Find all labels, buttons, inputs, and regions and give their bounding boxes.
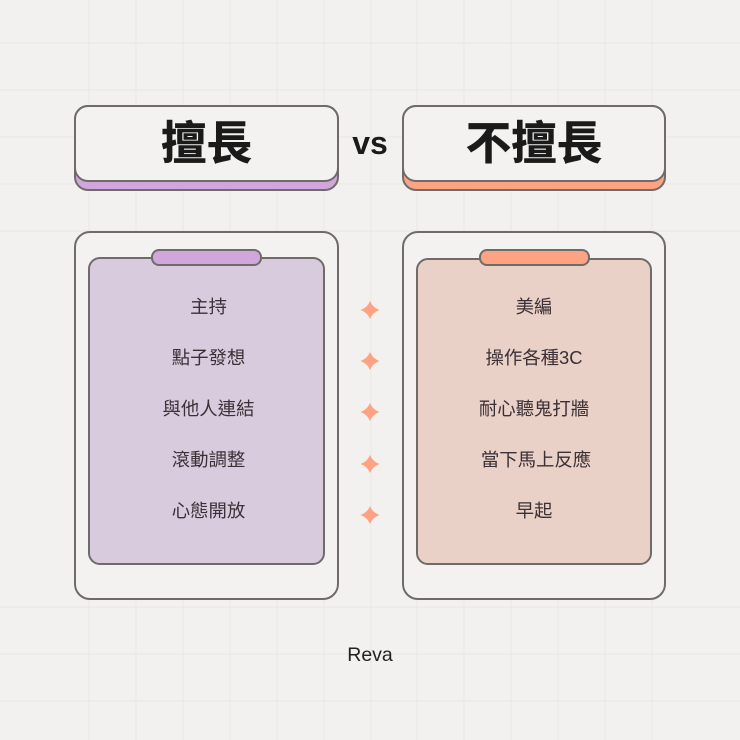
item: 美編 [516, 296, 552, 317]
vs label: vs [352, 125, 388, 161]
header title: 擅長: 擅長 [161, 118, 252, 169]
header: not good at [402, 105, 666, 191]
item: 當下馬上反應 [481, 449, 591, 470]
tab [479, 249, 590, 266]
item: 耐心聽鬼打牆 [479, 398, 589, 419]
item: 心態開放 [172, 500, 245, 521]
item: 與他人連結 [163, 398, 254, 419]
panel: good at [74, 231, 339, 600]
sparkle icons [360, 301, 380, 524]
header shadow bar [402, 105, 666, 191]
author: Reva: Reva [347, 644, 393, 666]
item: 早起 [516, 500, 552, 521]
header: good at [74, 105, 339, 191]
item: 操作各種3C [485, 347, 583, 368]
header title: 不擅長 [402, 105, 666, 182]
item: 主持 [190, 296, 227, 317]
header title: 不擅長: 不擅長 [466, 118, 602, 169]
item: 點子發想 [172, 347, 245, 368]
inner list card [88, 257, 325, 565]
item: 滾動調整 [172, 449, 245, 470]
panel: not good at [402, 231, 666, 600]
header shadow bar [74, 105, 339, 191]
inner list card [416, 258, 652, 565]
tab [151, 249, 262, 266]
header title: 擅長 [74, 105, 339, 182]
